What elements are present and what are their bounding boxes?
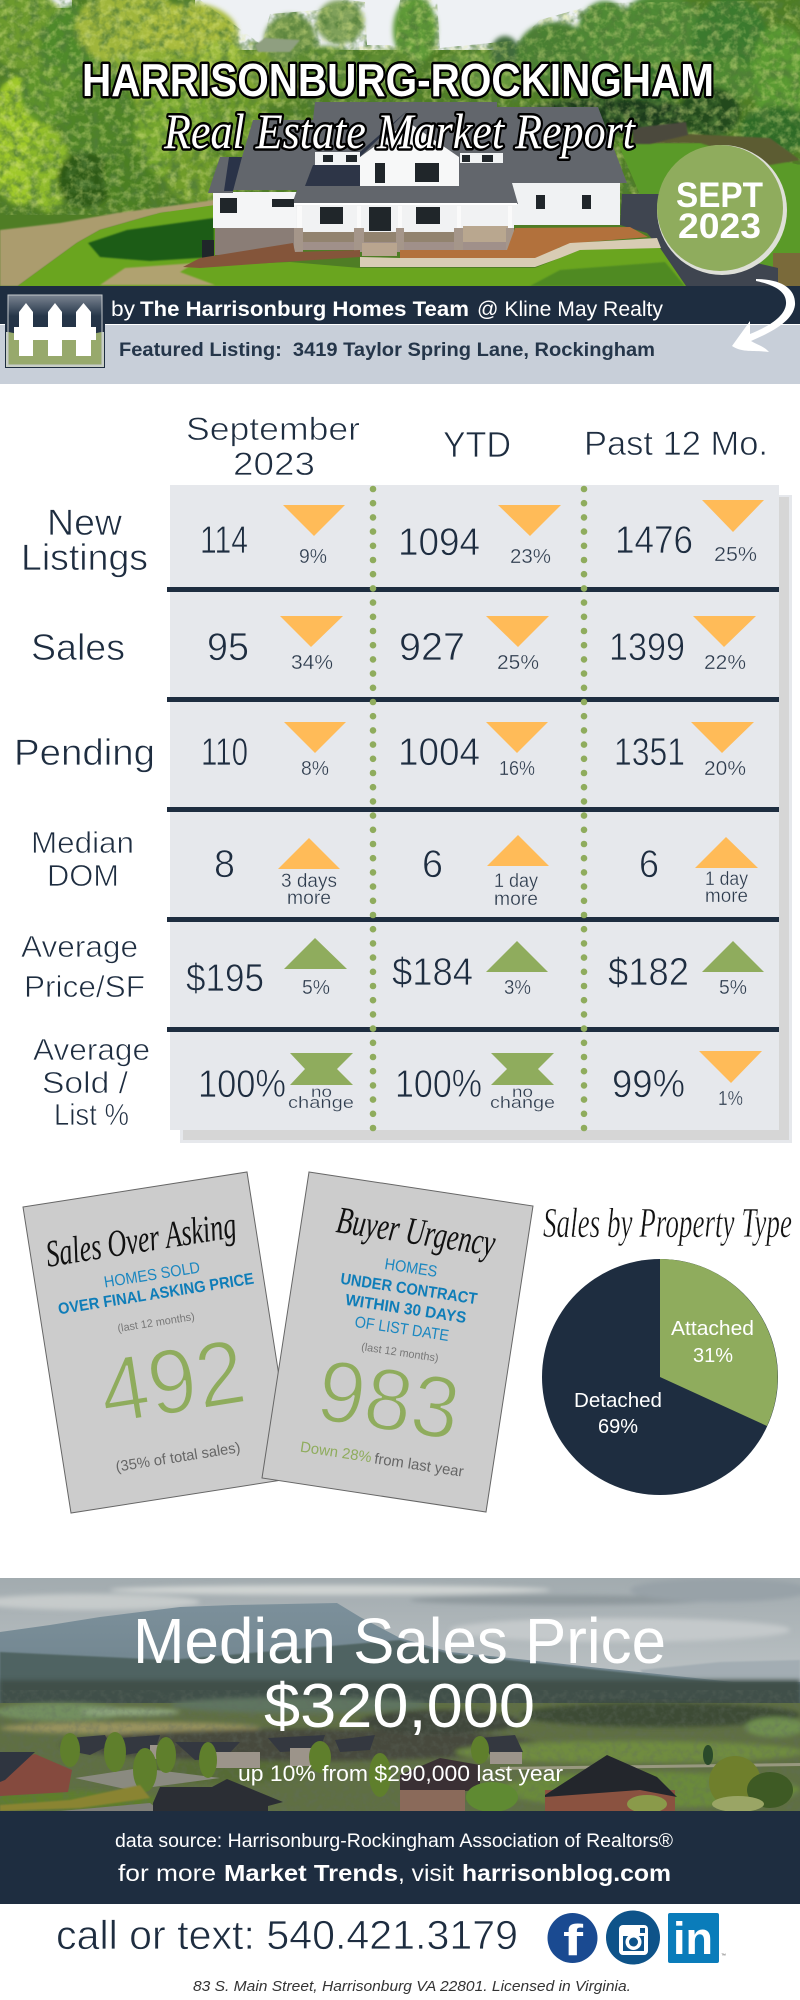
row: Sales <box>31 616 756 674</box>
row: Average Sold / List %: List % <box>54 1097 129 1132</box>
row: Sales: 95 <box>207 626 249 669</box>
row: New Listings: New <box>47 502 122 543</box>
row: Average Sold / List %: change <box>490 1093 555 1112</box>
photo: forested hill <box>0 1640 800 1703</box>
pie chart: property type: 31% <box>693 1345 733 1367</box>
row: New Listings: Listings <box>21 537 148 578</box>
contact phone: call or text: 540.421.3179 <box>56 1912 518 1958</box>
card: Sales Over Asking: 492 <box>93 1320 252 1444</box>
house: gable shadow <box>360 110 408 157</box>
row: New Listings: 23% <box>510 546 551 568</box>
row: Average Sold / List %: 99% <box>612 1063 685 1106</box>
house: windows <box>202 155 591 258</box>
date badge: 2023 <box>678 207 761 246</box>
house: dark lower roof <box>305 165 360 186</box>
photo: poplar trees <box>60 1732 489 1797</box>
card: Buyer Urgency: 983 <box>311 1340 466 1459</box>
row: Median DOM: more <box>287 888 331 909</box>
address line: 83 S. Main Street, Harrisonburg VA 22801. Licensed in Virginia. <box>193 1978 631 1995</box>
card: Buyer Urgency: HOMES <box>383 1256 438 1281</box>
column dividers: dotted <box>373 489 584 1130</box>
row: Median DOM: 8 <box>214 843 235 886</box>
featured listing band: Featured Listing: 3419 Taylor Spring Lane, Rockingham <box>119 340 655 361</box>
row: Average Sold / List %: 100% <box>198 1063 286 1106</box>
photo: foreground trees <box>466 1782 518 1812</box>
row: Pending: 1004 <box>398 731 480 774</box>
row: Average Sold / List %: change <box>288 1093 354 1112</box>
logo: white picket fence <box>5 291 105 368</box>
card: Buyer Urgency: from last year <box>373 1450 465 1481</box>
row: Sales: 927 <box>399 626 465 669</box>
house: porch roof eave <box>292 203 517 205</box>
source band: for more <box>118 1860 216 1886</box>
background: dirt patch <box>100 263 215 285</box>
card: Sales Over Asking: OVER FINAL ASKING PRICE <box>57 1271 255 1318</box>
photo: mountain and neighbourhood <box>0 1578 800 1813</box>
row: Pending: 20% <box>704 758 746 780</box>
row: Median DOM: 3 days <box>281 871 337 892</box>
source band: data source: Harrisonburg-Rockingham Association of Realtors® <box>115 1831 673 1852</box>
source band: harrisonblog.com <box>462 1860 671 1886</box>
background: dry field <box>0 200 215 286</box>
house: gable <box>360 122 459 186</box>
card: Buyer Urgency: UNDER CONTRACT <box>339 1271 478 1308</box>
table header: September 2023 <box>186 411 360 482</box>
row: Pending: 1351 <box>614 731 685 774</box>
table header: YTD: YTD <box>443 424 511 465</box>
row: New Listings: 9% <box>299 546 327 568</box>
row: New Listings: 1094 <box>398 521 480 564</box>
row: Median DOM: Median <box>31 825 134 860</box>
row: Median DOM: 6 <box>422 843 443 886</box>
background: hazy hill <box>255 38 300 52</box>
photo: valley ground <box>0 1703 800 1811</box>
row: Median DOM: 1 day <box>705 869 748 890</box>
pie chart: property type: 69% <box>598 1416 638 1438</box>
pie chart: property type: Detached <box>574 1390 662 1412</box>
row: Average Sold / List %: 1% <box>718 1088 743 1110</box>
row: Median DOM <box>31 825 758 910</box>
photo: centre dark roof <box>153 1779 283 1811</box>
row: Average Sold / List %: no <box>512 1084 533 1101</box>
house: dark roof valley <box>224 157 242 191</box>
house: porch wall <box>298 205 514 232</box>
photo: roofs in the middle distance <box>70 1735 523 1760</box>
table header: Past 12 Mo.: Past 12 Mo. <box>584 425 768 463</box>
row: Average Price/SF: 5% <box>719 977 747 999</box>
author band: by <box>111 298 136 321</box>
background: lawn shadow <box>88 218 214 261</box>
pie chart: property type: Attached <box>671 1318 754 1340</box>
card: Buyer Urgency <box>262 1172 533 1512</box>
table header: September 2023: September <box>186 411 360 447</box>
steps <box>362 243 397 256</box>
heading: Median Sales Price: Median Sales Price <box>133 1605 666 1677</box>
row: Sales: Sales <box>31 627 125 668</box>
row: Pending: 16% <box>499 758 535 780</box>
background: brown patch right <box>773 253 800 286</box>
photo: bottom-left brick house <box>0 1754 72 1796</box>
row: Average Sold / List %: 100% <box>395 1063 482 1106</box>
featured listing band <box>0 325 800 384</box>
icon: linkedin: ™ <box>721 1953 726 1959</box>
card: Buyer Urgency: Buyer Urgency <box>334 1199 498 1265</box>
card: Buyer Urgency: WITHIN 30 DAYS <box>344 1292 468 1327</box>
card: Sales Over Asking: Sales Over Asking <box>43 1204 239 1276</box>
author band: The Harrisonburg Homes Team <box>140 298 469 321</box>
house: right wing walls <box>512 183 620 225</box>
card: Sales Over Asking <box>23 1172 295 1513</box>
card: Sales Over Asking: (last 12 months) <box>117 1311 196 1335</box>
card: Buyer Urgency: (last 12 months) <box>360 1341 439 1365</box>
photo: town texture <box>0 1690 800 1811</box>
photo: road <box>75 1768 220 1790</box>
driveway <box>620 194 778 286</box>
row: Sales: 34% <box>291 652 333 674</box>
subtitle: Real Estate Market Report <box>163 103 636 159</box>
row: Pending: 8% <box>301 758 329 780</box>
background: log pile <box>633 122 688 144</box>
row: Pending <box>14 722 754 780</box>
row: Pending: Pending <box>14 732 155 773</box>
source band: Market Trends <box>224 1860 398 1886</box>
house: brick base <box>215 228 295 255</box>
table panel background with shadow <box>170 485 792 1143</box>
row: Median DOM: more <box>494 889 538 910</box>
hero photo: farmhouse and trees <box>0 0 800 286</box>
row: Median DOM: 6 <box>639 843 659 886</box>
author band <box>0 286 800 325</box>
icon: facebook <box>548 1913 598 1965</box>
row: Average Sold / List %: Sold / <box>42 1065 128 1100</box>
photo: houses centre <box>400 1758 480 1795</box>
row: Average Price/SF: $184 <box>392 951 473 994</box>
row: Median DOM: DOM <box>47 858 119 893</box>
card: Buyer Urgency: Down 28% <box>299 1439 373 1466</box>
house: roof <box>208 102 627 204</box>
background: brush strip <box>640 133 800 165</box>
background: lawn <box>18 205 686 286</box>
mulch beds <box>400 227 648 258</box>
row: New Listings: 114 <box>200 519 248 562</box>
card: Sales Over Asking: (35% of total sales) <box>115 1439 242 1476</box>
row: Average Price/SF: $182 <box>608 951 689 994</box>
date badge: SEPT <box>676 176 763 215</box>
row: Sales: 25% <box>497 652 539 674</box>
row dividers <box>167 587 779 1032</box>
icon: instagram <box>606 1910 660 1964</box>
table header: September 2023: 2023 <box>233 446 315 482</box>
photo: large brick house <box>545 1790 675 1811</box>
row: Average Sold / List %: Average <box>33 1032 150 1067</box>
photo: far ridge <box>641 1660 800 1682</box>
author band: @ Kline May Realty <box>477 298 663 321</box>
background: lawn shade right <box>530 262 685 286</box>
change note: up 10% from $290,000 last year <box>238 1761 563 1786</box>
row: New Listings <box>21 500 764 578</box>
pie chart: property type <box>542 1259 778 1495</box>
row: Average Price/SF: Average <box>21 929 138 964</box>
house: left wing walls <box>213 192 298 228</box>
row: Average Price/SF: $195 <box>186 957 264 1000</box>
background: right lawn <box>618 143 800 267</box>
row: Average Price/SF: 3% <box>504 977 531 999</box>
house: porch columns <box>297 206 512 228</box>
card: Sales Over Asking: HOMES SOLD <box>103 1260 201 1291</box>
row: Average Price/SF: 5% <box>302 977 330 999</box>
photo: dark forest band <box>0 1676 800 1703</box>
row: Average Price/SF <box>21 929 764 1004</box>
row: Average Sold / List %: no <box>311 1084 332 1101</box>
foliage texture <box>0 0 800 215</box>
row: Sales: 1399 <box>609 626 685 669</box>
walkway <box>360 238 661 267</box>
house: dormer <box>315 152 360 165</box>
row: Average Price/SF: Price/SF <box>24 969 145 1004</box>
row: Median DOM: more <box>705 886 748 907</box>
house: porch floor <box>303 232 454 242</box>
card: Buyer Urgency: OF LIST DATE <box>354 1314 450 1345</box>
row: Sales: 22% <box>704 652 746 674</box>
row: New Listings: 1476 <box>615 519 693 562</box>
source band: , visit <box>398 1860 455 1886</box>
date badge <box>657 145 787 275</box>
arrow: curved, pointing to listing <box>732 279 795 352</box>
source band <box>0 1811 800 1904</box>
median price value: $320,000 <box>264 1672 535 1741</box>
row: Median DOM: 1 day <box>494 871 538 892</box>
icon: facebook: f <box>563 1916 583 1965</box>
photo: shrubs <box>0 1785 150 1811</box>
row: Pending: 110 <box>201 731 248 774</box>
row: Average Sold / List % <box>33 1032 762 1132</box>
photo: mountain <box>0 1603 800 1703</box>
icon: linkedin: in <box>673 1913 713 1964</box>
icon: linkedin <box>668 1913 726 1964</box>
row: New Listings: 25% <box>714 544 757 566</box>
title: HARRISONBURG-ROCKINGHAM <box>82 54 714 106</box>
